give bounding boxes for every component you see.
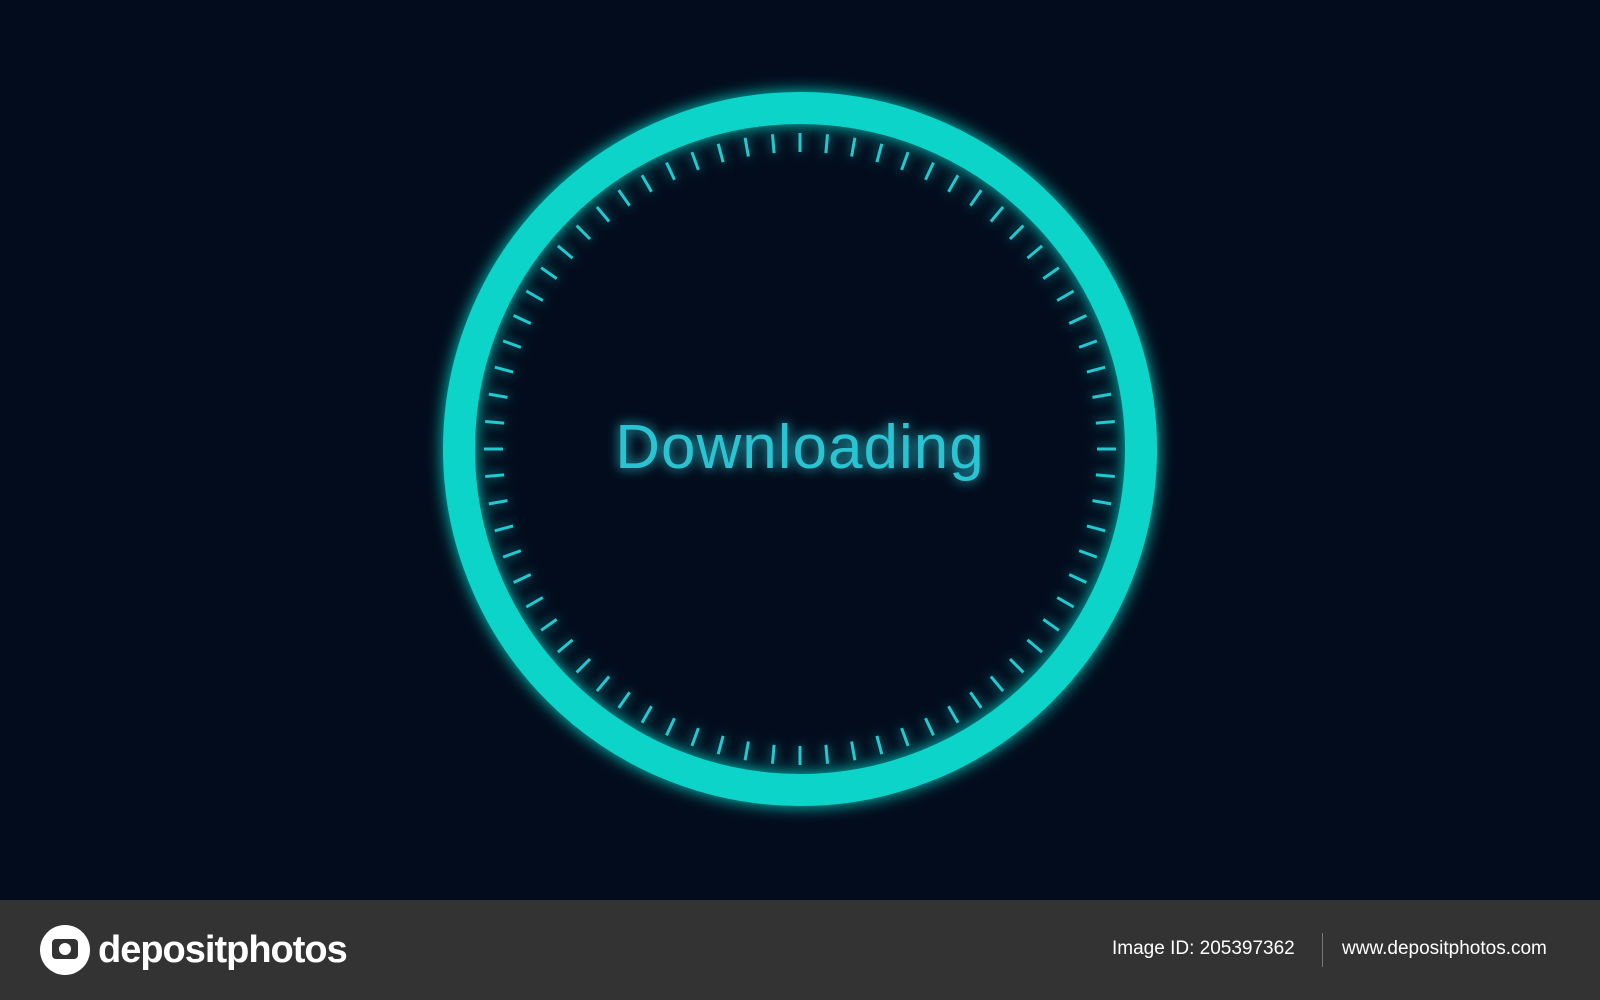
tick marks xyxy=(484,133,1116,765)
ring xyxy=(459,108,1141,790)
footer url: www.depositphotos.com xyxy=(1342,938,1547,959)
footer logo xyxy=(40,925,347,975)
footer logo: depositphotos xyxy=(98,928,347,970)
footer image id: Image ID: 205397362 xyxy=(1112,938,1295,959)
footer bar xyxy=(0,900,1600,1000)
label: Downloading: Downloading xyxy=(615,413,985,482)
